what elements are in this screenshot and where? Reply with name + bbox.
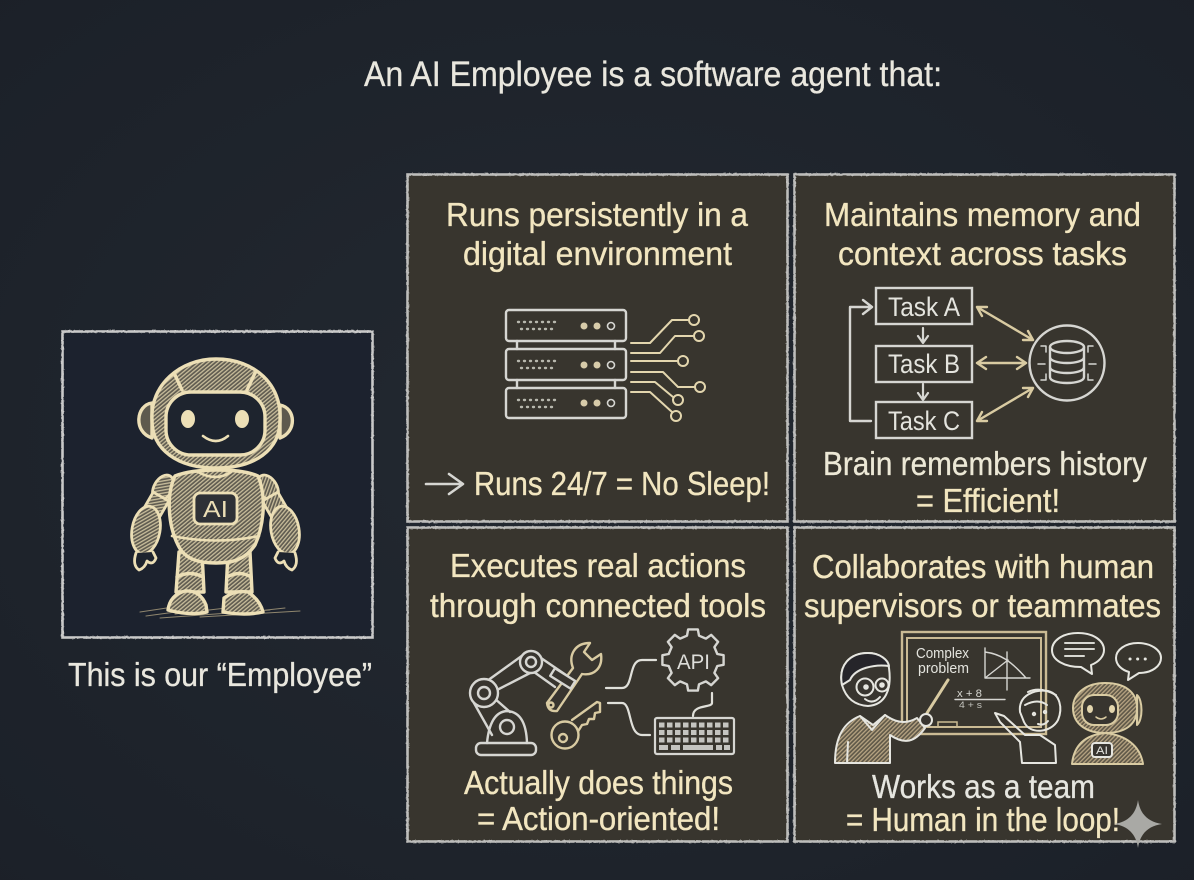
icon: blackboard: problem xyxy=(918,660,969,677)
memory arrows xyxy=(977,307,1033,421)
robot eyes xyxy=(181,410,249,428)
robot torso xyxy=(169,470,263,563)
icon: teacher xyxy=(835,653,948,763)
robot AI label: AI xyxy=(203,496,228,522)
icon: circuit wires xyxy=(631,315,705,421)
icon: server rack xyxy=(506,310,626,418)
icon: blackboard xyxy=(902,632,1046,734)
heading xyxy=(446,196,749,272)
icon: blackboard: 4 + s xyxy=(959,700,983,710)
takeaway: = Action-oriented! xyxy=(477,800,720,837)
robot shadow xyxy=(140,604,300,618)
arrows between tasks xyxy=(918,328,928,400)
speech bubble: dots xyxy=(1116,643,1161,680)
panel box xyxy=(794,174,1174,522)
takeaway: Brain remembers history xyxy=(823,445,1147,482)
icon: student xyxy=(995,690,1060,763)
robot left arm xyxy=(128,471,178,570)
heading: supervisors or teammates xyxy=(804,587,1161,624)
arrow xyxy=(426,474,463,494)
heading: through connected tools xyxy=(430,587,766,624)
icon: small robot: AI xyxy=(1096,745,1108,757)
board graph xyxy=(985,648,1030,690)
heading: Executes real actions xyxy=(450,547,746,584)
loop arrow xyxy=(850,300,872,421)
takeaway: Runs 24/7 = No Sleep! xyxy=(474,465,770,502)
panel: executes actions xyxy=(408,528,788,842)
robot feet xyxy=(168,591,263,614)
heading: Collaborates with human xyxy=(812,548,1154,585)
panel box xyxy=(408,528,788,842)
icon: API gear xyxy=(662,629,724,691)
heading xyxy=(824,196,1141,272)
task C: Task C xyxy=(888,406,960,436)
task B: Task B xyxy=(888,349,960,379)
task A xyxy=(876,288,972,324)
panel: runs persistently xyxy=(408,174,788,522)
robot right arm xyxy=(253,471,303,570)
title: An AI Employee is a software agent that: xyxy=(364,55,942,94)
takeaway xyxy=(846,768,1120,838)
robot ears xyxy=(139,403,292,438)
panel: employee robot xyxy=(62,332,372,693)
panel box xyxy=(794,528,1174,842)
takeaway: Works as a team xyxy=(872,768,1095,805)
icon: keyboard xyxy=(655,718,734,754)
task flow xyxy=(850,288,972,438)
icon: key xyxy=(552,702,600,748)
takeaway: Actually does things xyxy=(464,764,733,801)
panel box xyxy=(408,174,788,522)
robot legs xyxy=(176,552,252,592)
takeaway: = Human in the loop! xyxy=(846,801,1120,838)
task A: Task A xyxy=(888,292,960,322)
heading: Maintains memory and xyxy=(824,196,1141,233)
board text: Complex xyxy=(916,645,969,662)
connector lines xyxy=(606,660,712,735)
robot AI badge xyxy=(194,493,237,524)
speech bubble: lines xyxy=(1052,633,1104,674)
icon: sparkle watermark xyxy=(1114,800,1162,848)
panel: maintains memory xyxy=(794,174,1174,522)
robot visor xyxy=(166,392,265,455)
board equation: x + 8 xyxy=(957,688,982,700)
heading: digital environment xyxy=(463,235,732,272)
caption: This is our “Employee” xyxy=(68,656,372,693)
icon: robot arm xyxy=(470,651,566,755)
takeaway: = Efficient! xyxy=(916,482,1060,519)
heading xyxy=(430,547,766,624)
panel: collaborates xyxy=(794,528,1174,842)
icon: API gear: API xyxy=(677,651,710,674)
icon: wrench xyxy=(547,643,601,711)
heading xyxy=(804,548,1161,624)
takeaway xyxy=(823,445,1147,519)
icon: memory database xyxy=(1030,326,1104,400)
frame xyxy=(62,332,372,638)
heading: Runs persistently in a xyxy=(446,196,749,233)
takeaway xyxy=(464,764,733,837)
icon: small robot xyxy=(1072,683,1143,764)
robot head xyxy=(152,359,280,468)
icon: robot xyxy=(128,359,303,618)
heading: context across tasks xyxy=(838,235,1127,272)
robot smile xyxy=(203,436,228,441)
